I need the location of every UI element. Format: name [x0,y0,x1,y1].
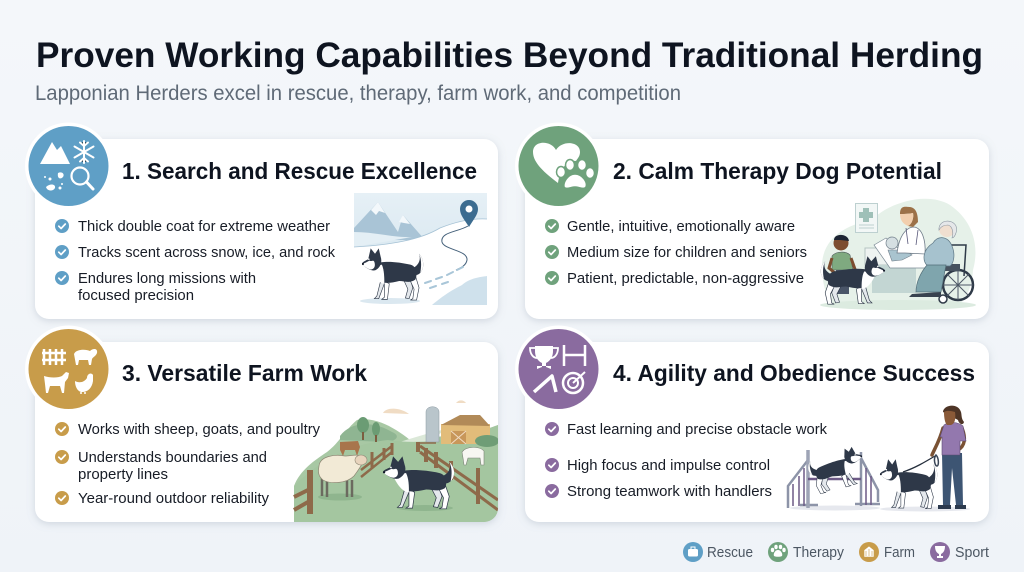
card background [35,139,498,319]
icon badge: mountain, snowflake, prints, magnifier [25,122,112,210]
bullet list: Endures long missions with [78,270,256,287]
bullet list: Tracks scent across snow, ice, and rock [78,244,335,261]
illustration: child, nurse, patient, senior and husky [820,199,976,310]
legend item: rescue: Rescue [707,545,753,561]
legend item: farm: Farm [884,545,915,561]
bullet list: Strong teamwork with handlers [567,483,772,500]
card background [35,342,498,522]
bullet list: Medium size for children and seniors [567,244,807,261]
illustration: husky jumping hurdle and handler with husky [788,406,970,512]
illustration: farm scene with sheep and husky [294,400,499,522]
panel: therapy [515,122,989,319]
bullet list: Patient, predictable, non-aggressive [567,270,804,287]
heading: 4. Agility and Obedience Success [613,360,975,386]
icon badge: fence, sheep, goat, chicken [25,326,112,412]
legend item: sport: Sport [955,545,989,561]
card background [525,139,989,319]
bullet list [545,421,827,500]
icon badge: heart and paw [515,122,602,210]
card background [525,342,989,522]
panel: search and rescue [25,122,498,319]
panel: farm work [25,326,499,522]
bullet list: Gentle, intuitive, emotionally aware [567,218,795,235]
bullet list [55,421,320,507]
bullet list [545,218,807,287]
legend item: therapy [768,542,845,562]
illustration: husky tracking through snow [354,193,487,305]
bullet list: Thick double coat for extreme weather [78,218,330,235]
heading: 3. Versatile Farm Work [122,360,368,386]
bullet list: High focus and impulse control [567,457,770,474]
title: Proven Working Capabilities Beyond Traditional Herding [36,35,983,75]
subtitle: Lapponian Herders excel in rescue, therapy, farm work, and competition [35,82,681,105]
bullet list: focused precision [78,287,194,304]
bullet list: Year-round outdoor reliability [78,490,269,507]
bullet list [55,218,335,304]
legend item: sport [930,542,989,562]
bullet list: Understands boundaries and [78,449,267,466]
panel: agility and obedience [515,326,989,522]
heading: 1. Search and Rescue Excellence [122,158,477,184]
heading: 2. Calm Therapy Dog Potential [613,158,942,184]
bullet list: Fast learning and precise obstacle work [567,421,827,438]
bullet list: property lines [78,466,168,483]
icon badge: trophy, hurdle, ramp, target [515,326,602,412]
bullet list: Works with sheep, goats, and poultry [78,421,320,438]
legend item: farm [859,542,915,562]
legend item: therapy: Therapy [793,545,845,561]
legend item: rescue [683,542,753,562]
legend [683,542,989,562]
